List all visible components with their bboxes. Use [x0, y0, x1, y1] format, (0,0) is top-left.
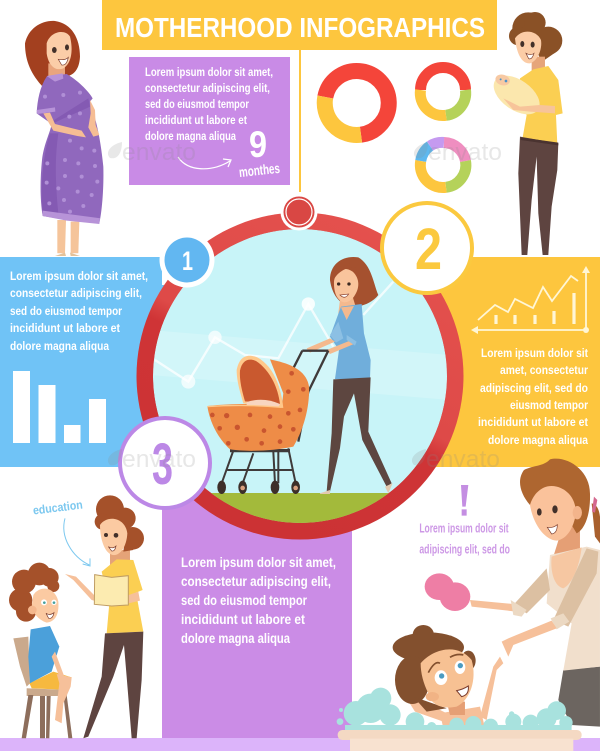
- numeral 2: 2: [415, 217, 442, 282]
- teacher neck: [110, 550, 130, 567]
- title banner: [102, 0, 497, 50]
- face features: [52, 44, 69, 65]
- number nine: 9: [249, 124, 267, 165]
- watermark top right: [414, 139, 502, 166]
- blue panel text: Lorem ipsum dolor sit amet,: [10, 269, 148, 283]
- stroller frame: [222, 351, 328, 483]
- mother hair tie: [592, 497, 597, 513]
- panel text: [145, 65, 273, 143]
- child neck: [447, 702, 465, 715]
- mother blouse: [547, 547, 600, 671]
- badge number 1: [160, 232, 214, 288]
- mother trousers: [558, 667, 600, 727]
- arm holding sponge: [470, 600, 517, 612]
- teacher face: [100, 519, 127, 555]
- child face: [32, 589, 58, 623]
- child ear: [426, 692, 439, 701]
- blue panel text: sed do eiusmod tempor: [10, 304, 122, 318]
- child arm and leg: [52, 652, 72, 723]
- mother figure: [307, 257, 393, 494]
- mother face features: [537, 505, 558, 534]
- curved arrow: [64, 518, 90, 566]
- teacher trousers: [83, 632, 143, 738]
- ponytail: [592, 503, 600, 543]
- mother hair: [520, 459, 590, 533]
- watermark lower left: [108, 446, 196, 473]
- donut chart large: [325, 71, 389, 135]
- watermark lower right: [412, 446, 500, 473]
- arm: [503, 98, 555, 113]
- purple panel text: [181, 554, 336, 646]
- child hair: [393, 625, 476, 712]
- pregnant woman: [25, 21, 103, 256]
- sponge: [425, 573, 470, 611]
- neck: [48, 63, 65, 80]
- legs: [57, 220, 79, 253]
- baby bundle: [487, 68, 547, 122]
- note text: Lorem ipsum dolor sit: [419, 520, 509, 535]
- waistband shadow: [521, 137, 558, 145]
- child face features: [41, 599, 57, 618]
- teacher arm: [65, 574, 140, 607]
- teacher hair: [95, 495, 144, 552]
- top ring badge: [280, 194, 318, 230]
- panel text: consectetur adipiscing elit,: [145, 81, 270, 95]
- collar and sleeve trim: [37, 73, 63, 114]
- arm reaching child: [502, 621, 557, 657]
- panel text: sed do eiusmod tempor: [145, 97, 249, 111]
- tub rim: [338, 730, 582, 740]
- numeral 3: 3: [152, 432, 173, 497]
- face: [47, 32, 72, 69]
- stroller bassinet: [207, 356, 309, 451]
- bar chart: [13, 371, 106, 443]
- yellow panel text: amet, consectetur: [500, 363, 588, 377]
- woman holding baby: [487, 12, 563, 255]
- child shorts: [29, 672, 72, 690]
- chair: [13, 637, 72, 738]
- sleeve cuffs: [511, 600, 569, 629]
- central circle scene: [136, 212, 464, 540]
- tub body: [350, 739, 573, 751]
- watermark top left: [108, 139, 196, 166]
- purple panel text: consectetur adipiscing elit,: [181, 573, 331, 589]
- hair: [25, 21, 80, 87]
- dress dots: [43, 91, 99, 214]
- mother face: [530, 486, 576, 541]
- watermark text: envato: [122, 139, 196, 166]
- child arms: [395, 657, 503, 722]
- panel text: Lorem ipsum dolor sit amet,: [145, 65, 273, 79]
- note text: adipiscing elit, sed do: [419, 541, 510, 556]
- child ear: [28, 606, 37, 614]
- purple panel text: sed do eiusmod tempor: [181, 592, 307, 608]
- blue panel text: dolore magna aliqua: [10, 339, 109, 353]
- mother neck: [553, 522, 580, 557]
- badge number 2: [382, 203, 472, 293]
- watermark text: envato: [122, 446, 196, 473]
- note text: [419, 520, 510, 556]
- dress: [37, 74, 103, 223]
- yellow panel text: incididunt ut labore et: [478, 415, 588, 429]
- curved arrow: [178, 157, 231, 169]
- arms: [43, 100, 99, 137]
- sky disc and ground: [150, 229, 450, 533]
- blue panel text: consectetur adipiscing elit,: [10, 286, 142, 300]
- panel: blue step one: [0, 257, 176, 467]
- panel: yellow step two: [430, 257, 600, 467]
- purple panel text: dolore magna aliqua: [181, 630, 290, 646]
- neckline: [551, 547, 582, 588]
- trousers: [518, 137, 558, 255]
- panel: nine months: [129, 57, 290, 185]
- yellow panel text: [478, 346, 588, 447]
- child hair: [9, 563, 59, 622]
- child body: [440, 707, 485, 728]
- line chart: [471, 266, 590, 334]
- neck: [532, 57, 545, 73]
- mother ear: [573, 506, 582, 519]
- title text: MOTHERHOOD INFOGRAPHICS: [115, 12, 485, 43]
- bottom strip: [0, 738, 600, 751]
- dress shading: [42, 98, 90, 213]
- stroller wheels: [217, 481, 300, 494]
- mother and child reading: [9, 495, 144, 738]
- numeral 1: 1: [182, 246, 193, 276]
- child shirt: [28, 626, 59, 683]
- child face features: [428, 654, 468, 697]
- hair: [509, 12, 562, 62]
- purple panel text: Lorem ipsum dolor sit amet,: [181, 554, 336, 570]
- blue panel text: [10, 269, 148, 353]
- badge number 3: [120, 418, 210, 508]
- child face: [421, 649, 474, 708]
- foam: [337, 688, 573, 733]
- exclamation mark: [461, 485, 468, 516]
- bath scene: [337, 459, 600, 751]
- watermark text: envato: [428, 139, 502, 166]
- monthes label: monthes: [238, 160, 281, 180]
- background trend line: [155, 282, 393, 389]
- teacher face features: [104, 533, 118, 551]
- donut chart medium: [420, 68, 466, 116]
- dress hem: [43, 211, 100, 224]
- divider line: [299, 50, 301, 192]
- purple panel text: incididunt ut labore et: [181, 611, 305, 627]
- face features: [520, 41, 535, 59]
- open book: [94, 575, 128, 606]
- red ring: [136, 212, 464, 540]
- watermark text: envato: [426, 446, 500, 473]
- education label: education: [32, 498, 83, 518]
- feet: [55, 253, 80, 256]
- yellow top: [518, 66, 563, 144]
- baby face: [494, 73, 511, 87]
- mother hair fringe: [530, 467, 587, 505]
- teacher top: [102, 559, 143, 633]
- donut chart multicolour: [420, 142, 466, 188]
- panel text: dolore magna aliqua: [145, 129, 236, 143]
- panel text: incididunt ut labore et: [145, 113, 247, 127]
- panel: purple step three: [162, 500, 352, 738]
- face: [515, 32, 541, 63]
- mother with stroller: [155, 257, 393, 494]
- upper sleeves: [513, 548, 598, 627]
- blue panel text: incididunt ut labore et: [10, 321, 120, 335]
